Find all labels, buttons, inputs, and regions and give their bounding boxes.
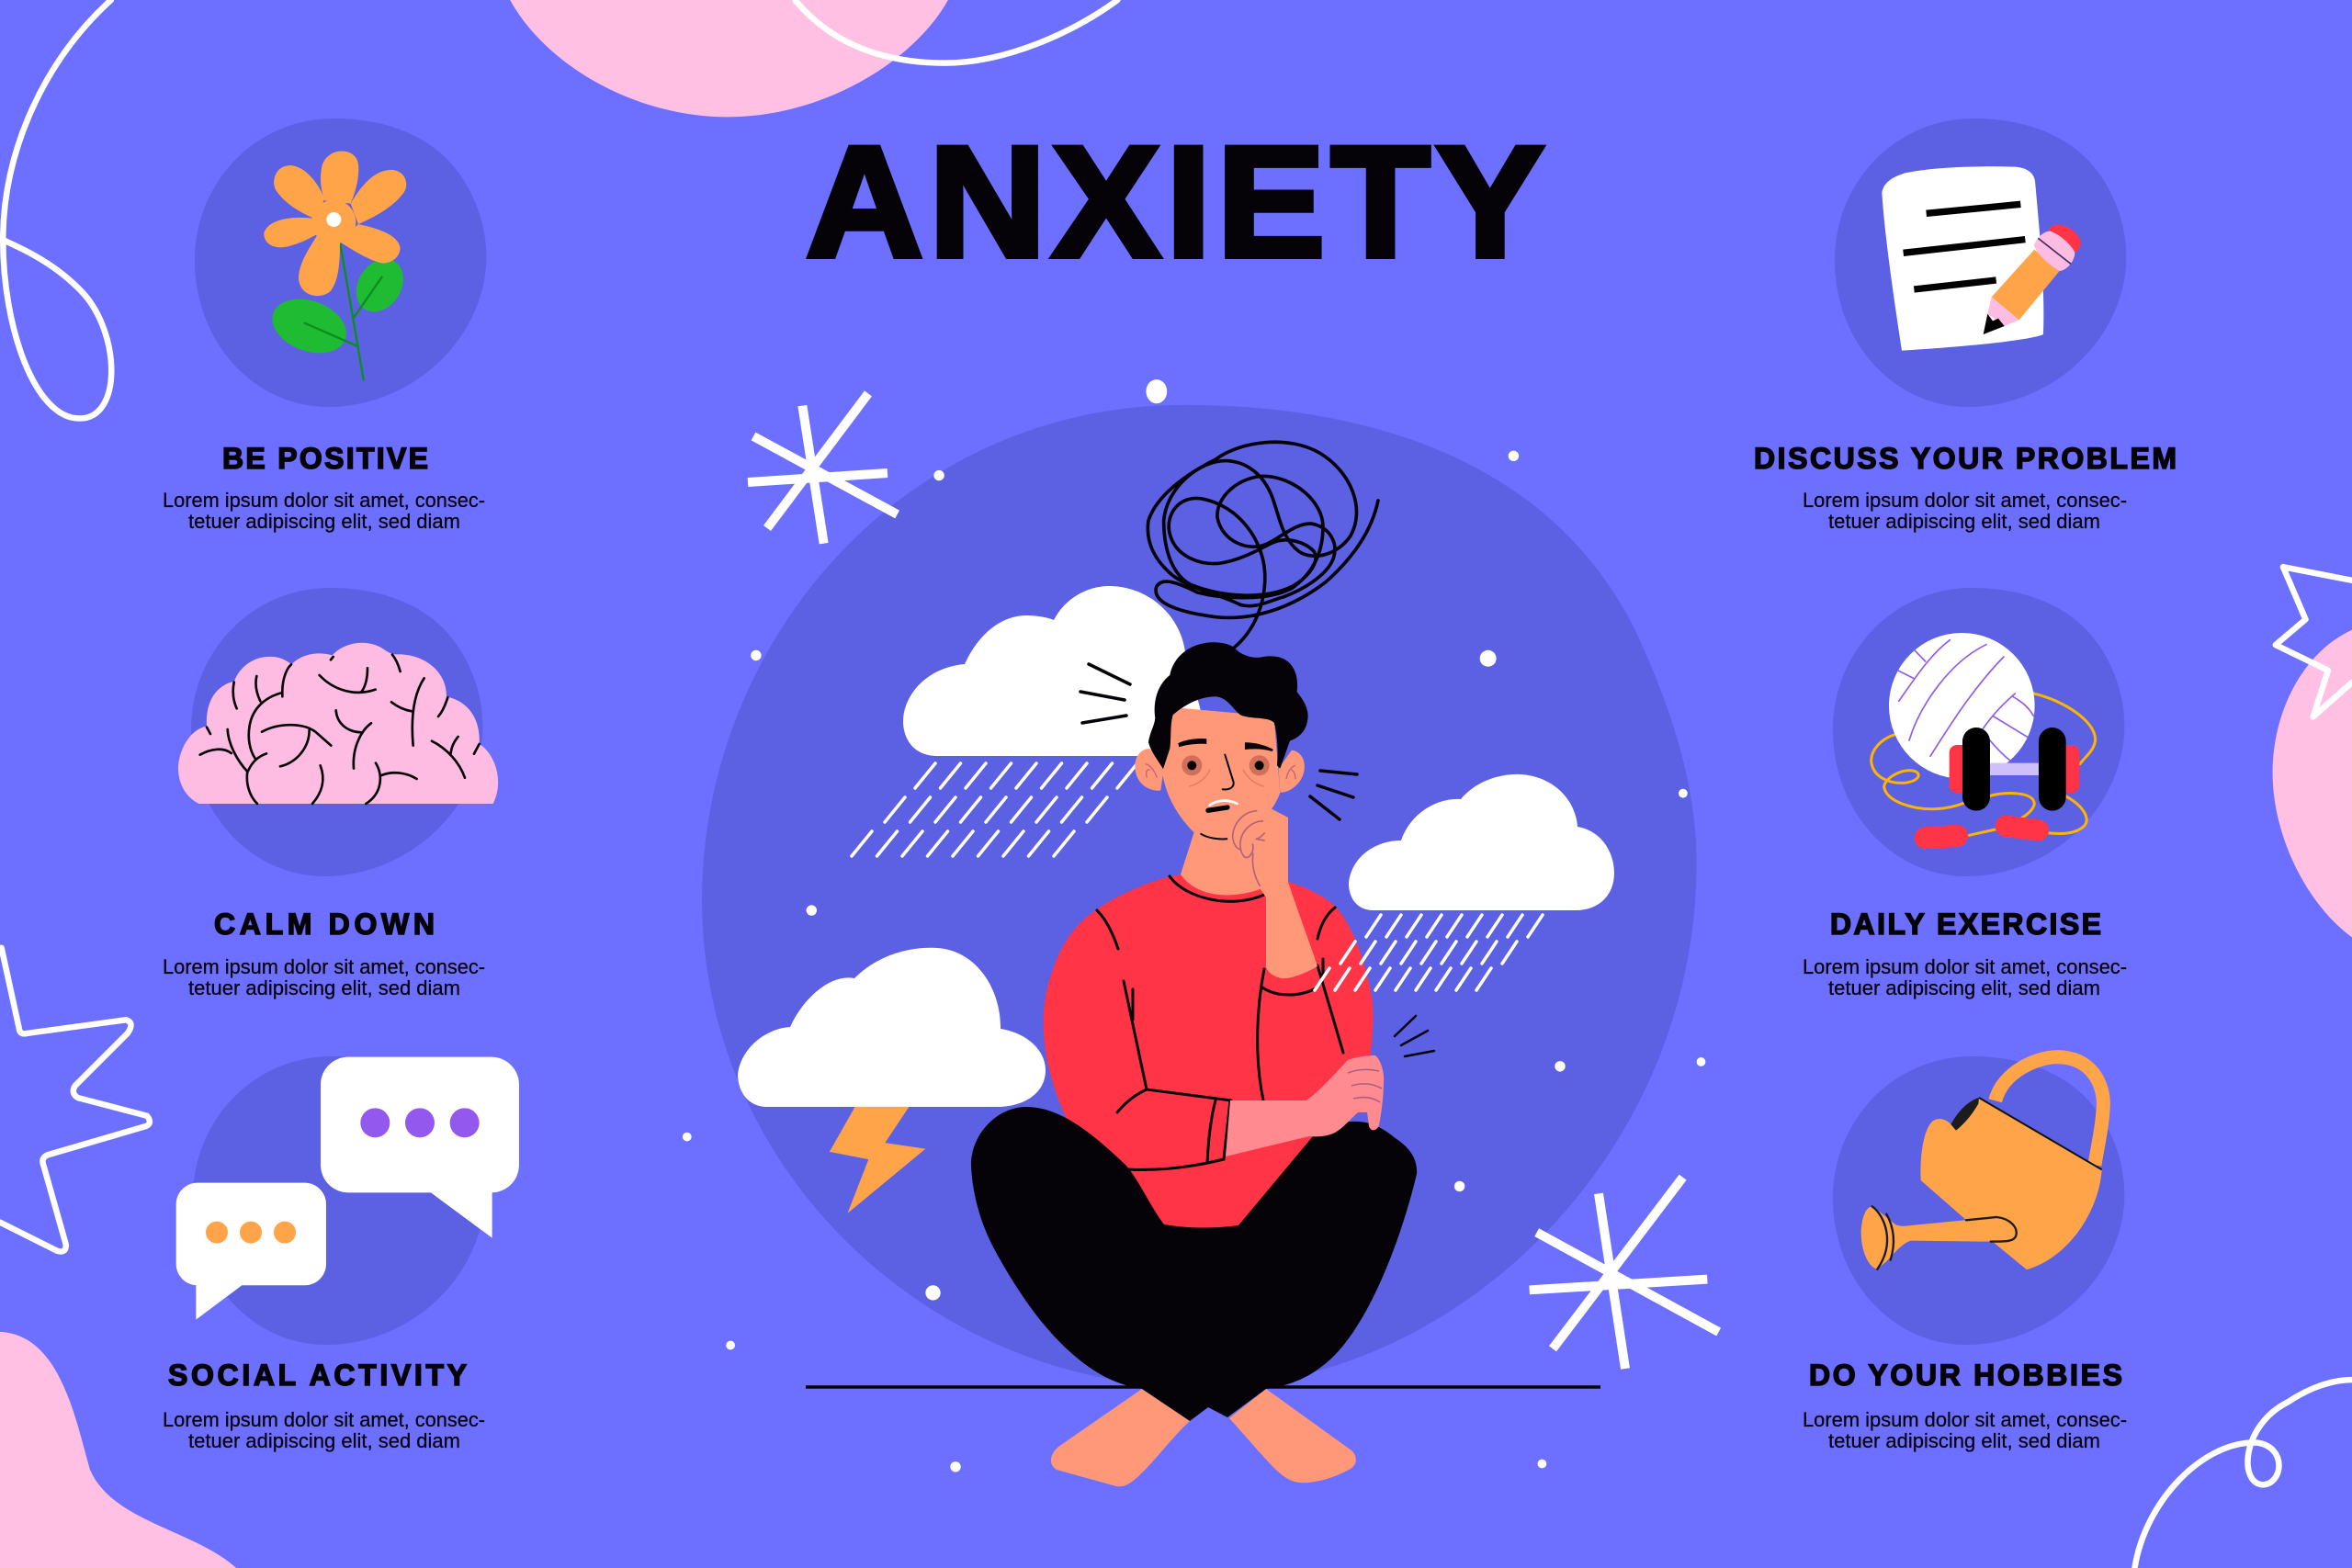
icon: brain	[178, 643, 498, 804]
central illustration	[683, 379, 1719, 1486]
description: tetuer adipiscing elit, sed diam	[1828, 1429, 2100, 1452]
description: Lorem ipsum dolor sit amet, consec-	[163, 955, 485, 978]
heading: DAILY EXERCISE	[1830, 908, 2101, 941]
rain right	[1315, 915, 1543, 990]
panel: be positive	[163, 118, 486, 533]
cloud upper left	[903, 586, 1213, 756]
feet	[1051, 1389, 1356, 1486]
description: tetuer adipiscing elit, sed diam	[188, 1429, 460, 1452]
icon backdrop blob	[193, 1056, 484, 1345]
cloud lower left	[738, 948, 1046, 1107]
central backdrop blob	[702, 405, 1697, 1387]
description: Lorem ipsum dolor sit amet, consec-	[1803, 489, 2127, 512]
neck	[1181, 822, 1277, 895]
ground line	[806, 1385, 1600, 1389]
heading: CALM DOWN	[214, 908, 435, 941]
icon backdrop blob	[1835, 118, 2126, 407]
icon backdrop blob	[195, 118, 486, 407]
description: Lorem ipsum dolor sit amet, consec-	[1803, 1408, 2127, 1431]
icon backdrop blob	[1833, 588, 2124, 876]
white dots	[683, 379, 1705, 1472]
heading: DISCUSS YOUR PROBLEM	[1754, 442, 2177, 475]
panel: daily exercise	[1803, 588, 2127, 999]
description: tetuer adipiscing elit, sed diam	[188, 976, 460, 999]
lightning bolt	[830, 1107, 925, 1213]
stress marks	[1080, 664, 1434, 1056]
person	[971, 642, 1543, 1486]
icon: chat bubbles	[176, 1057, 519, 1320]
sweater lines	[1097, 876, 1343, 1169]
heading: SOCIAL ACTIVITY	[168, 1359, 467, 1392]
description: Lorem ipsum dolor sit amet, consec-	[163, 1408, 485, 1431]
hand lines	[1233, 811, 1265, 886]
icon: watering can	[1861, 1057, 2103, 1269]
panel: social activity	[163, 1056, 519, 1452]
icon: paper and pencil	[1882, 166, 2081, 351]
rain upper left	[852, 763, 1137, 856]
description: tetuer adipiscing elit, sed diam	[188, 510, 460, 533]
finger lines	[1348, 1069, 1382, 1102]
panel: do your hobbies	[1803, 1056, 2127, 1452]
trousers	[971, 1107, 1417, 1421]
icon backdrop blob	[191, 588, 482, 876]
snowflake upper left	[748, 393, 898, 544]
resting arm	[1226, 1055, 1384, 1156]
description: Lorem ipsum dolor sit amet, consec-	[1803, 955, 2127, 978]
panel: discuss your problem	[1754, 118, 2177, 533]
panel: calm down	[163, 588, 498, 999]
description: tetuer adipiscing elit, sed diam	[1828, 976, 2100, 999]
icon backdrop blob	[1833, 1056, 2124, 1345]
description: Lorem ipsum dolor sit amet, consec-	[163, 489, 485, 512]
head	[1135, 642, 1308, 840]
description: tetuer adipiscing elit, sed diam	[1828, 510, 2100, 533]
heading: BE POSITIVE	[222, 442, 428, 475]
snowflake lower right	[1530, 1178, 1719, 1369]
icon: flower	[264, 151, 413, 379]
cloud right	[1349, 774, 1614, 910]
raised arm and hand	[1236, 808, 1317, 978]
heading: DO YOUR HOBBIES	[1809, 1359, 2122, 1392]
sweater	[1044, 873, 1373, 1231]
tangled thought scribble	[1148, 442, 1378, 648]
title: ANXIETY	[806, 114, 1550, 290]
icon: ball, dumbbell and skipping rope	[1871, 633, 2096, 838]
